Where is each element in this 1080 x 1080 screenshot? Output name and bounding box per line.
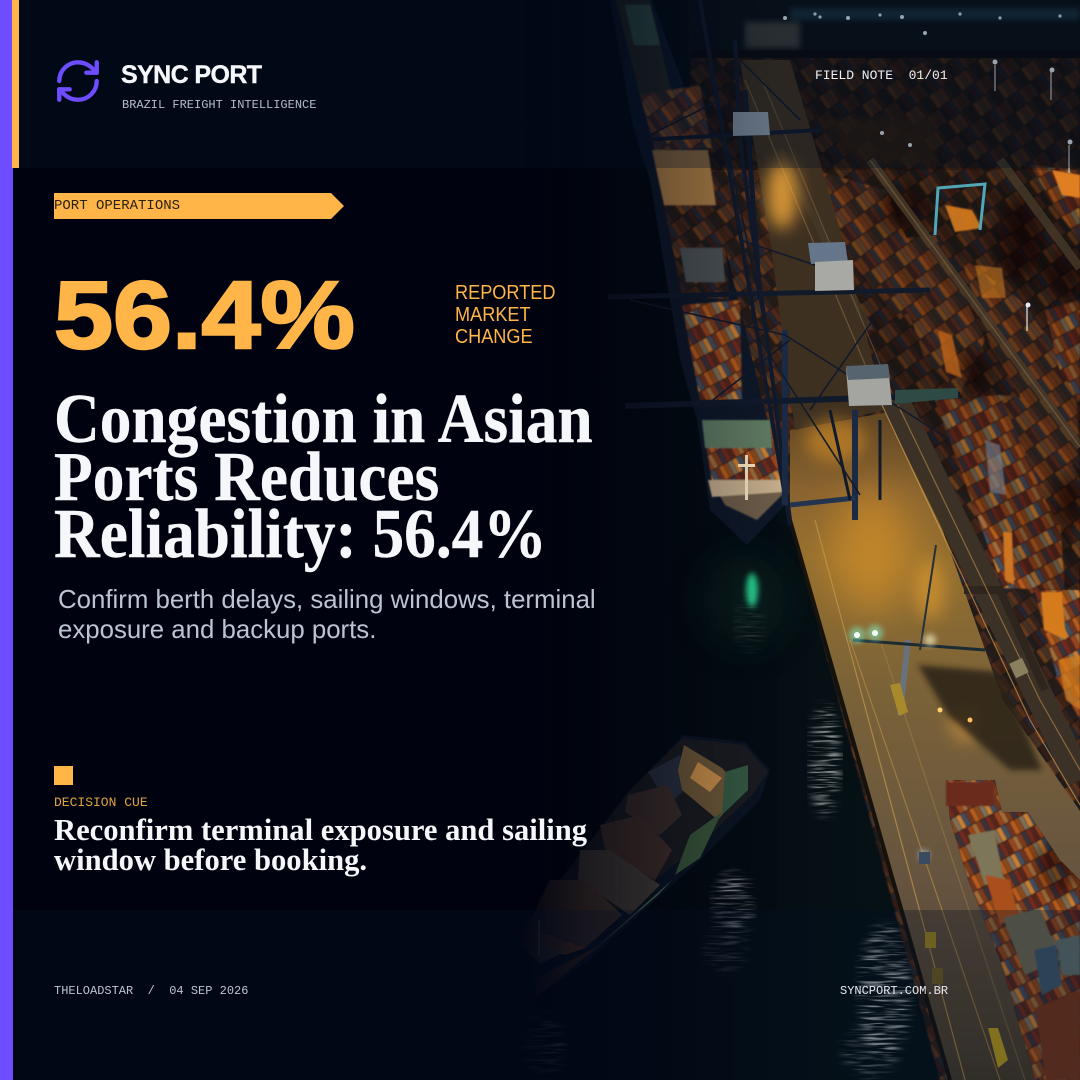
field note label: FIELD NOTE 01/01	[815, 68, 948, 83]
warm container blocks	[815, 165, 1080, 1080]
headline: Ports Reduces	[54, 438, 439, 516]
yard gantry	[935, 184, 985, 235]
icon: sync arrows	[57, 60, 99, 102]
category tag: PORT OPERATIONS	[54, 198, 180, 214]
bright container highlights	[938, 170, 1080, 1080]
brand tagline: BRAZIL FREIGHT INTELLIGENCE	[122, 98, 316, 112]
apron shadow by mobile crane	[918, 665, 1042, 770]
container ship underway	[518, 735, 770, 997]
headline: Congestion in Asian	[54, 381, 593, 458]
cue statement: Reconfirm terminal exposure and sailing	[54, 813, 587, 847]
stat label	[455, 281, 555, 348]
apron glow	[766, 161, 981, 743]
ship at berth	[610, 0, 785, 545]
bottom band tint	[0, 910, 1080, 1080]
water reflections	[516, 599, 911, 1076]
headline: Reliability: 56.4%	[54, 496, 547, 573]
yard dark stack shadows	[690, 50, 1080, 894]
crane machine houses	[733, 112, 958, 406]
subtitle	[58, 586, 596, 644]
stat label: MARKET	[455, 303, 531, 326]
apron	[790, 410, 1080, 1080]
source and date: THELOADSTAR / 04 SEP 2026	[54, 984, 248, 998]
cranes	[608, 0, 985, 715]
brand name: SYNC PORT	[121, 61, 261, 89]
subtitle: exposure and backup ports.	[58, 616, 376, 644]
stat label: REPORTED	[455, 281, 555, 304]
orange accent bar	[12, 0, 19, 168]
headline	[54, 381, 593, 573]
yard lights	[783, 15, 1072, 331]
upper roadway	[740, 60, 885, 430]
top band tint	[0, 0, 1080, 168]
floodlights and vehicles on apron	[849, 625, 1029, 1068]
website: SYNCPORT.COM.BR	[840, 984, 948, 998]
cue statement: window before booking.	[54, 843, 367, 877]
cue statement	[54, 813, 587, 877]
category tag	[54, 193, 344, 219]
yard roads	[780, 150, 1080, 780]
yard ground with dark containers	[690, 0, 1080, 1080]
stat label: CHANGE	[455, 325, 533, 348]
far terminal strip	[690, 0, 1080, 165]
road and rail lines	[745, 80, 1080, 1080]
cue label: DECISION CUE	[54, 795, 148, 810]
purple side bar	[0, 0, 13, 1080]
cue marker	[54, 766, 73, 785]
big stat: 56.4%	[54, 262, 355, 369]
subtitle: Confirm berth delays, sailing windows, terminal	[58, 586, 596, 614]
